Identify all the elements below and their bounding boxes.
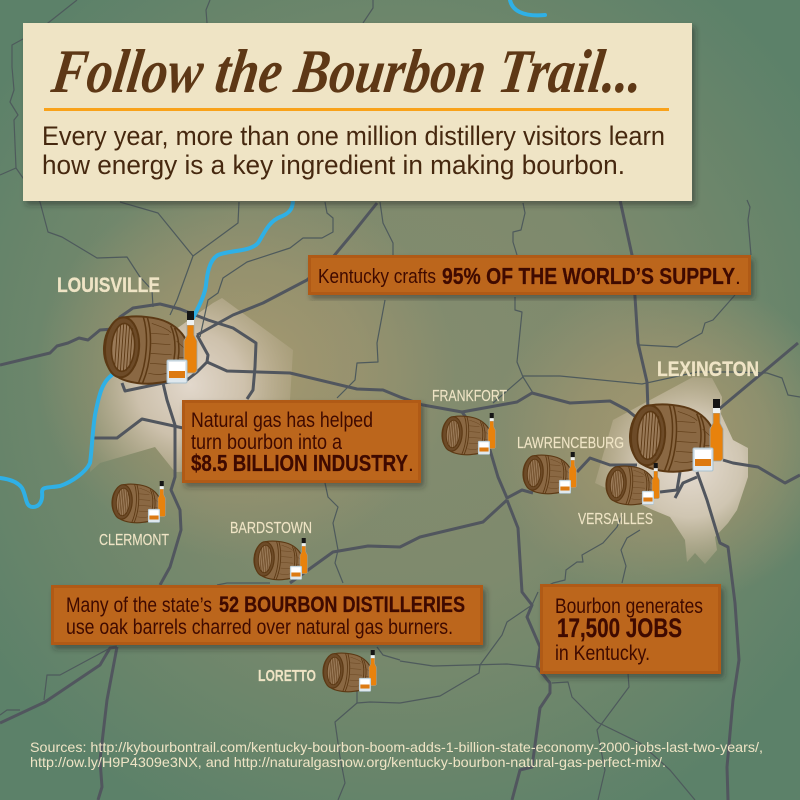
callout: jobs: 17,500 JOBS bbox=[557, 613, 682, 643]
callout: world supply: . bbox=[735, 266, 741, 289]
subtitle: Every year, more than one million distillery visitors learn bbox=[42, 121, 665, 151]
callout: distilleries: Many of the state’s bbox=[66, 594, 212, 617]
icon: Loretto barrel bbox=[322, 650, 376, 693]
river bbox=[0, 0, 545, 507]
major highways bbox=[0, 200, 800, 800]
callout: world supply: 95% OF THE WORLD’S SUPPLY bbox=[442, 263, 735, 289]
icon: Frankfort barrel bbox=[441, 413, 495, 456]
subtitle: how energy is a key ingredient in making bourbon. bbox=[42, 150, 625, 180]
label: Louisville: LOUISVILLE bbox=[57, 274, 160, 297]
label: Loretto: LORETTO bbox=[258, 668, 316, 685]
label: Lawrenceburg: LAWRENCEBURG bbox=[517, 435, 624, 452]
label: Lexington: LEXINGTON bbox=[657, 358, 759, 381]
icon: Clermont barrel bbox=[111, 481, 165, 524]
callout: jobs: in Kentucky. bbox=[555, 642, 650, 665]
callout: distilleries: use oak barrels charred over natural gas burners. bbox=[66, 616, 453, 639]
label: Clermont: CLERMONT bbox=[99, 532, 169, 549]
city area: Lexington bbox=[595, 377, 748, 564]
sources bbox=[30, 739, 763, 770]
panel: title bbox=[23, 23, 692, 201]
sources: http://ow.ly/H9P4309e3NX, and http://naturalgasnow.org/kentucky-bourbon-natural-gas-perfect-mix/. bbox=[30, 754, 666, 770]
city area: Louisville bbox=[90, 298, 293, 472]
callout: world supply: Kentucky crafts bbox=[318, 266, 436, 288]
subtitle bbox=[42, 121, 665, 180]
callout: jobs: Bourbon generates bbox=[555, 595, 703, 618]
icon: Versailles barrel bbox=[605, 463, 659, 506]
callout: billion industry: $8.5 BILLION INDUSTRY bbox=[191, 450, 408, 476]
icon: Lexington barrel bbox=[628, 399, 723, 475]
label: Versailles: VERSAILLES bbox=[578, 511, 653, 528]
callout: billion industry: Natural gas has helped bbox=[191, 409, 373, 432]
label: Frankfort: FRANKFORT bbox=[432, 388, 507, 405]
icon: Bardstown barrel bbox=[253, 538, 307, 581]
icon: Louisville barrel bbox=[102, 311, 197, 387]
callout: world supply bbox=[310, 256, 750, 294]
callout: distilleries: 52 BOURBON DISTILLERIES bbox=[219, 592, 465, 617]
callout: billion industry: . bbox=[408, 453, 414, 476]
icon: Lawrenceburg barrel bbox=[522, 452, 576, 495]
callout: billion industry: turn bourbon into a bbox=[191, 431, 342, 454]
callout: billion industry bbox=[184, 402, 420, 482]
callout: jobs bbox=[542, 586, 720, 672]
heading: Follow the Bourbon Trail... bbox=[47, 37, 648, 106]
callout: distilleries bbox=[52, 586, 482, 644]
label: Bardstown: BARDSTOWN bbox=[230, 520, 312, 537]
sources: Sources: http://kybourbontrail.com/kentucky-bourbon-boom-adds-1-billion-state-economy-2000-jobs-last-two-years/, bbox=[30, 739, 763, 755]
